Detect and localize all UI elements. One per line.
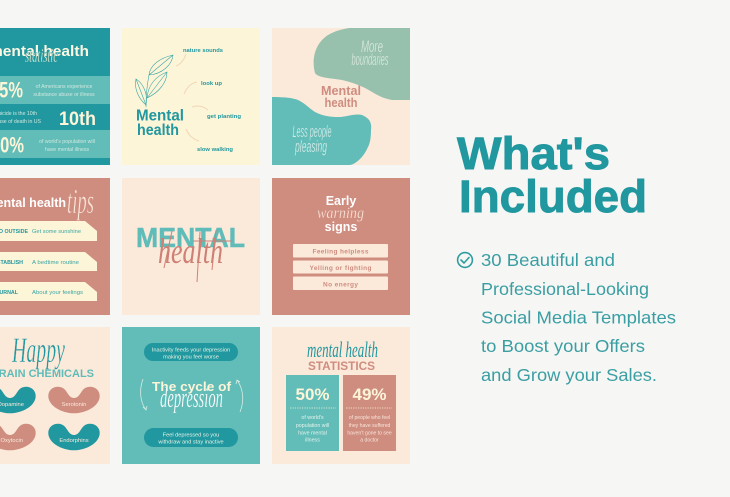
text block: feature description: to Boost your Offers [481, 336, 645, 356]
ribbon: go outside: Get some sunshine [32, 229, 81, 235]
stat box: 49 percent: haven't gone to see [347, 430, 392, 436]
stat description: americans: substance abuse or illness [33, 92, 95, 98]
labels: activities: slow walking [197, 147, 234, 153]
script: health: health [158, 231, 223, 271]
pill: inactivity: Inactivity feeds your depression [152, 348, 230, 354]
stat box: 50 percent: 50% [295, 385, 330, 404]
pill: inactivity: making you feel worse [163, 354, 219, 360]
panel: cycle of depression card [122, 327, 260, 464]
script: warning: warning [317, 206, 364, 222]
ribbon: journal [0, 282, 97, 301]
script: more boundaries: More [361, 37, 383, 56]
arrow: left cycle [141, 379, 147, 410]
stat box: 50 percent: of world's [301, 415, 324, 421]
script: less people pleasing [292, 122, 332, 156]
stat description: world population: of world's population will [39, 139, 95, 145]
stat box: 49 percent: of people who feel [349, 415, 390, 421]
stat box: 49 percent: 49% [352, 385, 387, 404]
title: what's included: Included [459, 171, 647, 222]
stat box: 49 percent: a doctor [360, 438, 379, 444]
panel: happy brain chemicals card [0, 327, 110, 464]
script: mental health: mental health [307, 338, 378, 363]
labels: activities: get planting [207, 114, 242, 120]
pill: feel depressed: withdraw and stay inactive [157, 440, 224, 446]
panel: mental health tips card [0, 178, 110, 315]
panel: mental health activities card: health [137, 122, 179, 139]
text block: feature description: Professional-Looking [481, 279, 649, 299]
labels: activities [183, 48, 242, 153]
text block: feature description: Social Media Templates [481, 308, 676, 328]
title: what's included [457, 128, 647, 222]
labels: activities: nature sounds [183, 48, 223, 54]
box: yelling or fighting: Yelling or fighting [310, 265, 372, 272]
ribbon: establish: A bedtime routine [32, 260, 79, 266]
panel: more boundaries card [272, 28, 410, 165]
shape: sage blob [314, 28, 410, 100]
heading: statistics: STATISTICS [308, 361, 375, 373]
blob: endorphins: Endorphins [59, 438, 89, 444]
panel: mental health activities card [122, 28, 260, 165]
text block: feature description: and Grow your Sales. [481, 365, 657, 385]
ribbon: journal: About your feelings [32, 290, 83, 296]
script: less people pleasing: Less people [293, 122, 332, 141]
shape: teal blob [272, 97, 371, 165]
stat box: 49 percent [343, 375, 396, 451]
stat box: 50 percent: have mental [298, 430, 327, 436]
pill: feel depressed: Feel depressed so you [163, 432, 219, 438]
stat box: 50 percent: illness [305, 438, 320, 444]
panel: mental health statistics card [272, 327, 410, 464]
box: feeling helpless: Feeling helpless [312, 248, 369, 256]
stat description: americans: of Americans experience [36, 84, 93, 90]
text block: feature description: 30 Beautiful and [481, 250, 615, 270]
box: no energy: No energy [323, 282, 358, 288]
icon: leaf branch [135, 55, 173, 107]
script: more boundaries: boundaries [352, 50, 388, 69]
heading: signs: signs [325, 220, 357, 234]
script: less people pleasing: pleasing [294, 137, 327, 156]
ribbon: go outside [0, 221, 97, 241]
heading: mental health: Mental [136, 108, 184, 124]
stat box: 50 percent [286, 375, 339, 451]
template card grid [0, 28, 410, 464]
title: what's included: What's [457, 128, 610, 179]
heading: MENTAL: MENTAL [136, 222, 245, 253]
panel: mental health statistic card [0, 28, 110, 165]
pill: inactivity [144, 343, 238, 361]
panel: early warning signs card [272, 178, 410, 315]
blob: oxytocin: Oxytocin [0, 438, 23, 444]
heading: mental health: Mental [321, 84, 361, 98]
script: statistic: statistic [25, 44, 58, 67]
blob: serotonin: Serotonin [62, 402, 86, 408]
arrow: right cycle [236, 380, 243, 412]
stat description: world population: have mental illness [45, 147, 89, 153]
script: depression: depression [160, 383, 223, 414]
stat: 10th: 10th [59, 109, 96, 130]
labels: activities: look up [201, 81, 223, 87]
stat box: 49 percent: they have suffered [349, 423, 391, 429]
pill: feel depressed [144, 428, 238, 447]
arrows: curved connectors [176, 54, 208, 141]
panel: more boundaries card: health [324, 96, 358, 110]
script: more boundaries [352, 37, 388, 69]
stat box: 50 percent: population will [296, 423, 329, 429]
panel: mental health title card [122, 178, 260, 315]
script: happy: Happy [11, 330, 65, 370]
text block: feature description [481, 250, 676, 385]
heading: early: Early [326, 194, 356, 208]
icon: check circle [458, 253, 472, 267]
script: tips: tips [67, 184, 94, 221]
heading: the cycle of: The cycle of [152, 379, 232, 394]
ribbon: establish [0, 252, 97, 271]
